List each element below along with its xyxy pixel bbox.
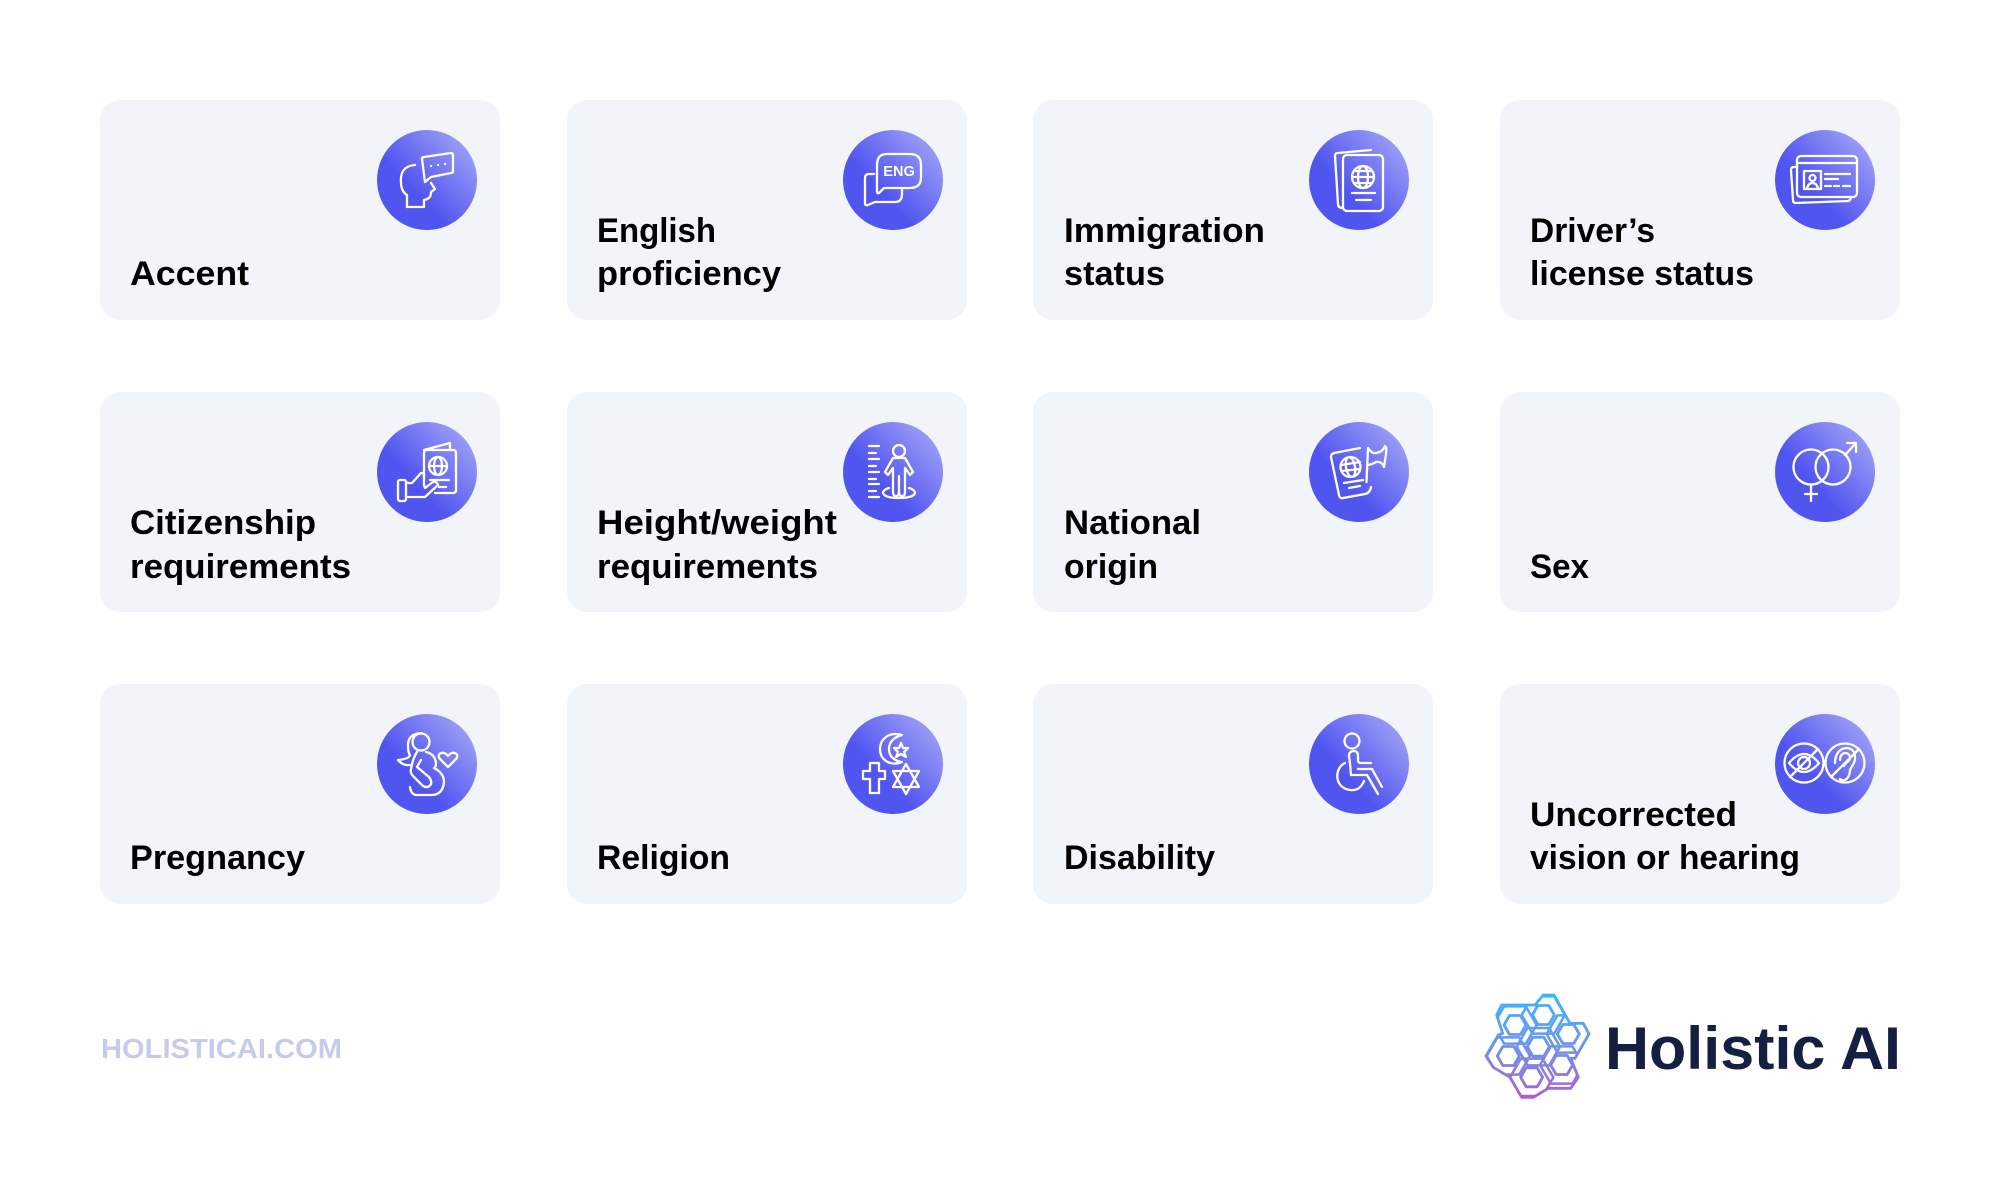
card background [567,392,967,612]
icon: wheelchair user [1309,714,1409,814]
panel: Pregnancy [100,684,500,904]
panel: Uncorrected vision or hearing [1500,684,1900,904]
label line 2: origin [1064,548,1158,586]
card background [567,100,967,320]
icon: ENG speech bubbles: ENG [883,164,915,180]
icon: pregnant woman with heart [377,714,477,814]
panel: Height/weight requirements [567,392,967,612]
panel: Accent [100,100,500,320]
card background [1033,100,1433,320]
website address: HOLISTICAI.COM [101,1033,342,1064]
panel: Disability [1033,684,1433,904]
icon: gender symbols [1775,422,1875,522]
logo mark: hexagon lattice [1486,995,1590,1097]
card background [1033,392,1433,612]
label: Uncorrected [1530,796,1737,834]
label line 2: requirements [597,548,818,586]
label: Pregnancy [130,839,305,877]
card background [1033,684,1433,904]
card background [567,684,967,904]
icon: passport and flag [1309,422,1409,522]
panel: English proficiency [567,100,967,320]
icon: crossed eye and ear [1775,714,1875,814]
card background [100,100,500,320]
panel: Religion [567,684,967,904]
panel: Immigration status [1033,100,1433,320]
label: National [1064,504,1201,542]
label line 2: status [1064,255,1165,293]
panel: Sex [1500,392,1900,612]
card background [1500,684,1900,904]
label: Immigration [1064,212,1265,250]
icon: passports [1309,130,1409,230]
panel: Citizenship requirements [100,392,500,612]
card background [100,684,500,904]
label line 2: proficiency [597,255,781,293]
icon: religious symbols [843,714,943,814]
label line 2: requirements [130,548,351,586]
label: Driver’s [1530,212,1655,250]
icon: hand holding passport [377,422,477,522]
label: Height/weight [597,504,837,542]
panel: National origin [1033,392,1433,612]
icon: ENG speech bubbles [843,130,943,230]
logo wordmark: Holistic AI [1605,1015,1901,1082]
icon: head with speech bubble [377,130,477,230]
icon: ID cards [1775,130,1875,230]
label: Disability [1064,839,1215,877]
icon: person with height scale [843,422,943,522]
label: Accent [130,255,249,293]
panel: Driver's license status [1500,100,1900,320]
label: Citizenship [130,504,316,542]
card background [1500,100,1900,320]
label line 2: vision or hearing [1530,839,1800,877]
card background [100,392,500,612]
label line 2: license status [1530,255,1754,293]
card background [1500,392,1900,612]
label: Religion [597,839,730,877]
logo: Holistic AI [1486,995,1901,1097]
label: Sex [1530,548,1589,586]
label: English [597,212,716,250]
